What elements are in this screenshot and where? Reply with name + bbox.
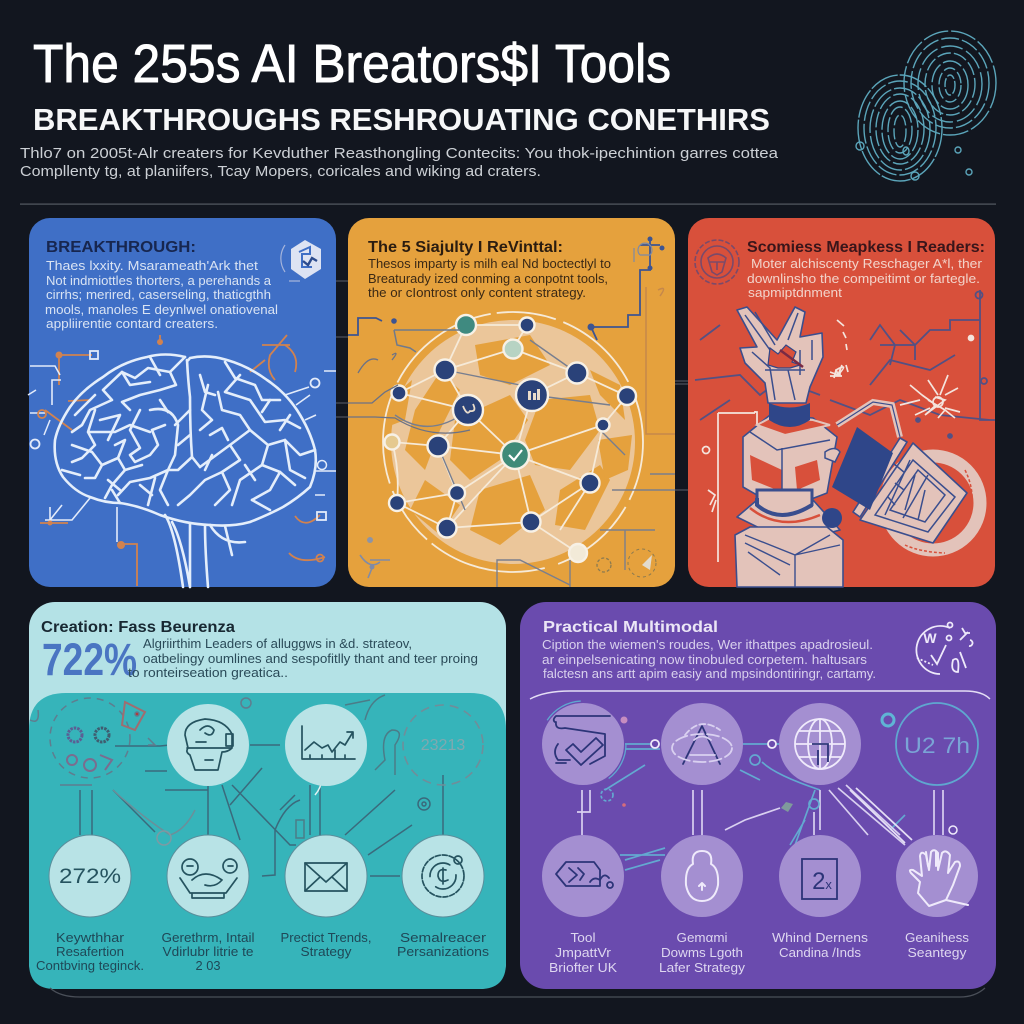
purple labels: Candina /Inds (779, 945, 861, 960)
network connectors (80, 695, 443, 876)
orange panel heading: The 5 Siajulty I ReVinttal: (368, 239, 563, 256)
background circuits (695, 290, 995, 438)
teal panel text (128, 636, 478, 680)
circle: check layers icon (540, 701, 626, 787)
circuit traces (28, 335, 336, 586)
teal lower section (29, 693, 506, 989)
ghost number ring (403, 705, 483, 785)
white accents (702, 320, 974, 562)
circle: globe icon (779, 703, 861, 785)
circle: face icon (167, 704, 249, 786)
intro text: Thlo7 on 2005t-Alr creaters for Kevduther Reasthongling Contecits: You thok-ipechintion garres cottea (20, 145, 779, 162)
purple panel text (542, 637, 876, 681)
teal panel text: oatbelingy oumlines and sespofitlly thant and teer proing (143, 651, 478, 666)
blue panel text: Not indmiottles thorters, a perehands a (46, 273, 272, 288)
panel: orange network (348, 218, 675, 587)
red panel heading: Scomiess Meapkess I Readers: (747, 239, 985, 256)
teal labels: Resafertion (56, 944, 124, 959)
ghost number ring: 23213 (421, 737, 465, 754)
network connectors (577, 714, 957, 870)
teal panel text: to ronteirseation greatica.. (128, 665, 288, 680)
blue panel text: mools, manoles E deynlwel onatiovenal (45, 302, 278, 317)
purple labels (549, 930, 970, 975)
teal labels: Persanizations (397, 944, 490, 959)
panel: purple multimodal (520, 602, 996, 989)
illustration: brain (55, 354, 316, 587)
subtitle: BREAKTHROUGHS RESHROUATING CONETHIRS (33, 102, 770, 137)
blue panel text: Thaes lxxity. Msarameath'Ark thet (46, 258, 258, 273)
panel: red robot (688, 218, 995, 587)
circle: trend chart icon (285, 704, 367, 786)
connector lines between panels (336, 281, 688, 490)
purple labels: Seantegy (908, 945, 967, 960)
circle: 272% stat (49, 835, 131, 917)
teal labels: Strategy (300, 944, 352, 959)
network globe (383, 312, 643, 572)
ghost gears diagram (30, 698, 251, 785)
circle: lock icon (661, 835, 743, 917)
big stat: 722% (42, 634, 137, 685)
purple panel text: falctesn ans artt apim easiy and mpsindontiringr, cartamy. (543, 666, 876, 681)
purple labels: Geanihess (905, 930, 970, 945)
outer frame line (50, 988, 985, 997)
teal labels: Semalreacer (400, 930, 487, 945)
teal labels (36, 930, 490, 973)
panel: teal creation (29, 602, 506, 989)
orange panel text: the or cIontrost only content strategy. (368, 285, 586, 300)
orange panel text: Thesos imparty is milh eal Nd boctectlyl to (368, 256, 611, 271)
intro text: Compllenty tg, at planiifers, Tcay Mopers, coricales and wiking ad craters. (20, 163, 541, 180)
circle: terminal icon (542, 835, 624, 917)
circle: 2x icon (779, 835, 861, 917)
purple panel text: Ciption the wiemen's roudes, Wer ithattpes apadrosieul. (542, 637, 873, 652)
teal labels: Prectict Trends, (280, 930, 372, 945)
circle: 272% stat: 272% (59, 865, 121, 888)
red panel text: sapmiptdnment (748, 285, 842, 300)
purple panel heading: Practical Multimodal (543, 619, 718, 636)
red panel text (747, 256, 983, 300)
blue panel text: cirrhs; merired, caserseling, thaticgthh (46, 287, 271, 302)
blue panel heading: BREAKTHROUGH: (46, 239, 196, 256)
purple labels: JmpattVr (555, 945, 612, 960)
orange panel text: Breaturady ized conming a conpotnt tools, (368, 271, 608, 286)
circle: hand icon (896, 835, 978, 917)
icon: fingerprints (856, 31, 996, 181)
teal panel heading: Creation: Fass Beurenza (41, 619, 235, 636)
teal labels: Contbving teginck. (36, 958, 144, 973)
circle: envelope icon (285, 835, 367, 917)
teal labels: Vdirlubr litrie te (162, 944, 254, 959)
icon: W check badge (916, 622, 973, 674)
icon: gear face badge (695, 240, 739, 284)
blue panel text (45, 258, 278, 331)
circle: people icon (167, 835, 249, 917)
inner frame arc (530, 691, 990, 699)
circle: tent orbit icon (661, 703, 743, 785)
illustration: robot arm (735, 307, 980, 587)
teal panel text: Algriirthim Leaders of alluggws in &d. strateov, (143, 636, 412, 651)
circle: gear icon (402, 835, 484, 917)
purple panel text: ar einpelsenicating now tinobuled corpetem. haltusars (542, 652, 868, 667)
red panel text: Moter alchiscenty Reschager A*l, ther (751, 256, 983, 271)
icon: hexagon badge (281, 240, 321, 281)
teal labels: 2 03 (196, 958, 220, 973)
purple labels: Lafer Strategy (659, 960, 746, 975)
purple labels: Gemαmi (676, 930, 728, 945)
teal labels: Gerethrm, Intail (162, 930, 255, 945)
title: The 255s AI Breators$I Tools (33, 34, 671, 94)
purple labels: Briofter UK (549, 960, 617, 975)
circle: 2x icon: 2x (812, 868, 832, 895)
circuit traces (348, 236, 675, 587)
purple labels: Whind Dernens (772, 930, 869, 945)
network nodes (384, 315, 636, 562)
icon: W check badge: W (923, 630, 937, 646)
orange panel text (368, 256, 611, 300)
purple labels: Tool (570, 930, 596, 945)
red panel text: downlinsho the compeitimt or fartegle. (747, 271, 980, 286)
purple labels: Dowms Lgoth (661, 945, 743, 960)
blue panel text: appliirentie contard creaters. (46, 316, 218, 331)
panel: blue breakthrough (28, 218, 336, 587)
intro text (20, 145, 779, 180)
ring: U2 7h (896, 703, 978, 785)
teal labels: Keywthhar (56, 930, 125, 945)
ring: U2 7h: U2 7h (904, 733, 970, 758)
